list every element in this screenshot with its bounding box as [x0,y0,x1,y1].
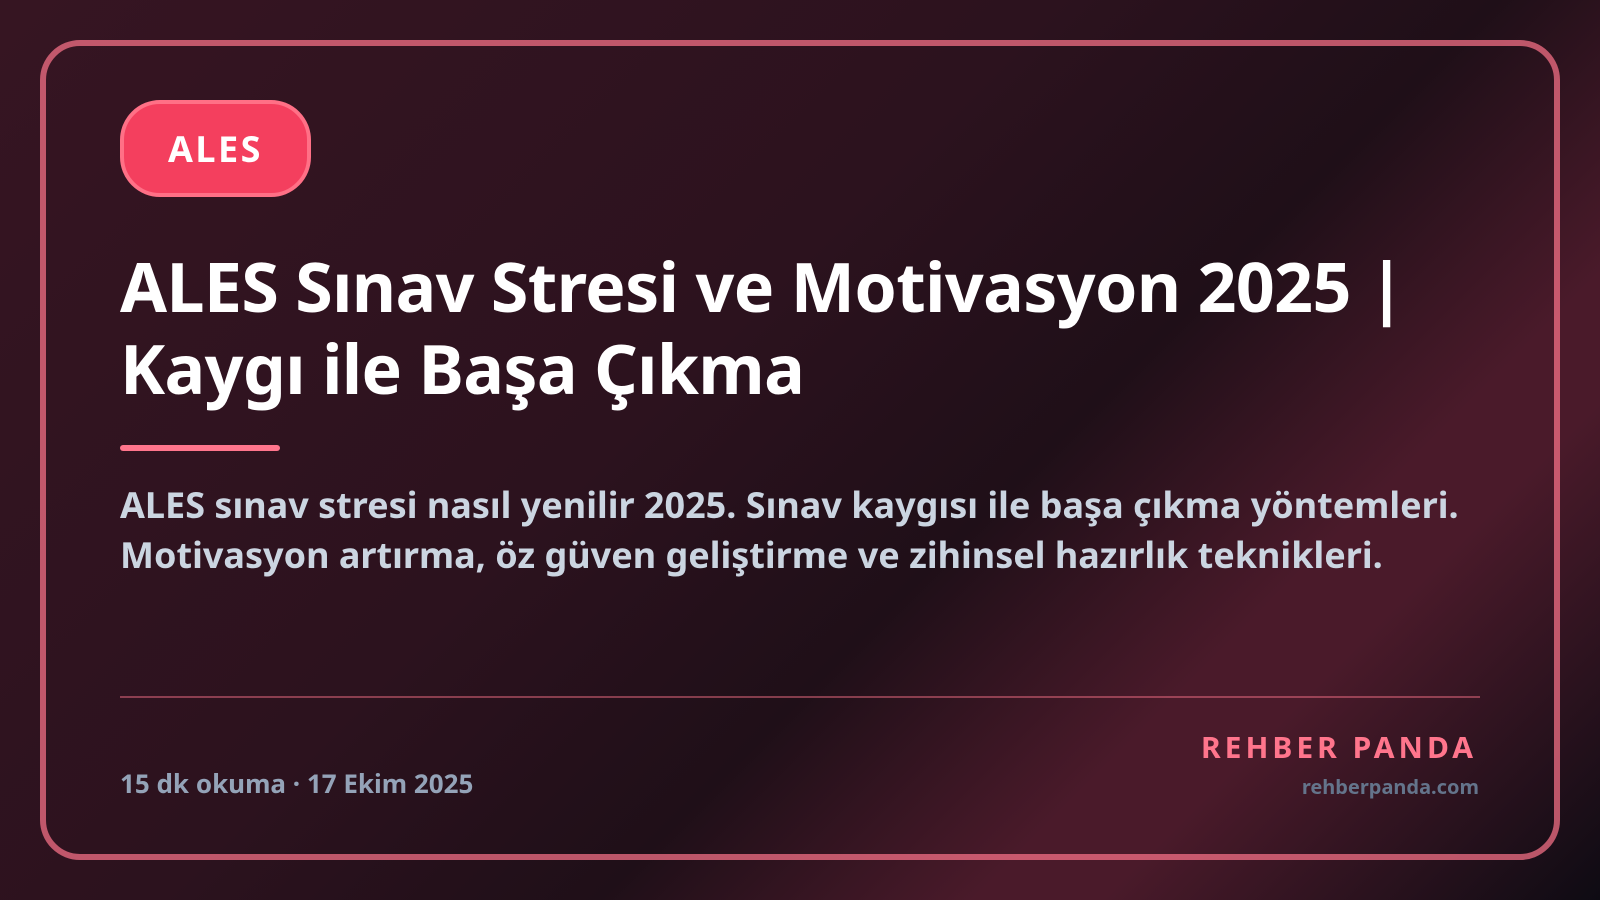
title: ALES Sınav Stresi ve Motivasyon 2025 | [120,239,1405,332]
badge: ALES [120,100,311,197]
subtitle text: ALES sınav stresi nasıl yenilir 2025. Sınav kaygısı ile başa çıkma yöntemleri. [120,480,1459,529]
website url: rehberpanda.com [1302,773,1479,800]
subtitle text: Motivasyon artırma, öz güven geliştirme ve zihinsel hazırlık teknikleri. [120,530,1383,579]
accent underline [120,445,280,451]
brand name: REHBER PANDA [1201,726,1477,767]
title: Kaygı ile Başa Çıkma [120,321,804,414]
badge: ALES: ALES [168,124,263,173]
title [120,239,1405,414]
footer divider [120,696,1480,698]
reading time and date: 15 dk okuma · 17 Ekim 2025 [120,765,473,801]
subtitle text [120,480,1459,579]
